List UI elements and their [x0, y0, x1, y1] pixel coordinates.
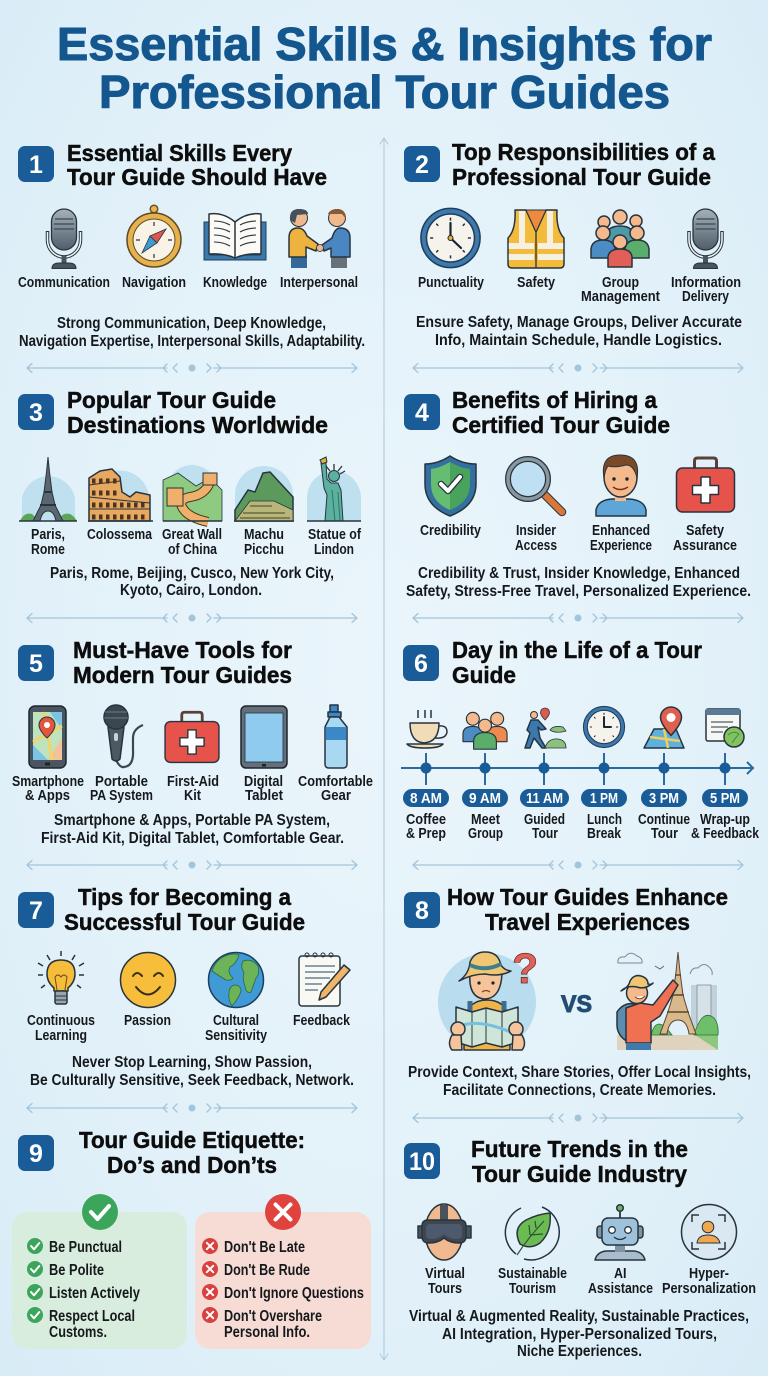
icon labels 10: Tours: [428, 1281, 462, 1297]
summary 5: First-Aid Kit, Digital Tablet, Comfortable Gear.: [41, 830, 344, 847]
timeline labels: Break: [587, 826, 622, 842]
icon labels 5: First-Aid: [167, 774, 219, 790]
panel: 6 day in the life: [401, 637, 760, 842]
card: do's: Customs.: [49, 1324, 107, 1341]
heading 3: Popular Tour Guide: [67, 387, 276, 413]
timeline: 1 PM: [590, 791, 618, 807]
icon labels 10: Virtual: [425, 1266, 465, 1282]
summary 3: Paris, Rome, Beijing, Cusco, New York City,: [50, 565, 334, 582]
icon: statue of liberty: [307, 457, 361, 521]
card: do's: Be Punctual: [49, 1239, 122, 1256]
icon: globe: [208, 952, 264, 1008]
timeline: 11 AM: [526, 791, 563, 807]
badge 8: [404, 892, 440, 928]
title: Professional Tour Guides: [99, 66, 670, 118]
icon labels 3: Picchu: [244, 542, 284, 558]
heading 8: How Tour Guides Enhance: [447, 884, 728, 910]
heading 1: Tour Guide Should Have: [67, 164, 327, 190]
panel: 4 benefits: [404, 387, 751, 600]
icon: clock: [421, 208, 480, 268]
icon labels 2: Group: [602, 275, 639, 291]
card: do's: Respect Local: [49, 1308, 135, 1325]
heading 10: Tour Guide Industry: [472, 1161, 687, 1187]
icon labels 5: Kit: [184, 788, 201, 804]
icon labels 7: Continuous: [27, 1013, 95, 1029]
icon: great wall: [163, 465, 222, 522]
icon: microphone: [48, 209, 80, 268]
icon: map with pin: [644, 707, 684, 748]
icon: notepad and pencil: [299, 953, 350, 1006]
icon labels 1: Navigation: [122, 275, 186, 291]
heading 5: Must-Have Tools for: [73, 637, 292, 663]
timeline labels: Group: [468, 826, 503, 842]
icon: colosseum: [88, 469, 153, 521]
heading 1: Essential Skills Every: [67, 140, 292, 166]
icon labels 7: Cultural: [213, 1013, 259, 1029]
heading 9: Do’s and Don’ts: [107, 1152, 277, 1178]
timeline labels: Coffee: [406, 812, 446, 828]
central vertical divider arrow: [380, 138, 388, 1360]
card: do's: Be Polite: [49, 1262, 104, 1279]
icon labels 5: Comfortable: [298, 774, 373, 790]
card: don'ts: Don't Be Rude: [224, 1262, 310, 1279]
panel: 3 destinations: [18, 387, 361, 599]
timeline labels: & Prep: [406, 826, 446, 842]
icon labels 3: Paris,: [31, 527, 65, 543]
icon labels 10: Sustainable: [498, 1266, 567, 1282]
title: Essential Skills & Insights for: [57, 18, 712, 70]
icon labels 7: Passion: [124, 1013, 171, 1029]
heading 6: [452, 637, 702, 688]
heading 2: Professional Tour Guide: [452, 164, 711, 190]
badge 6: [403, 645, 439, 681]
badge 7: 7: [29, 897, 43, 925]
icon labels 4: Assurance: [673, 538, 737, 554]
heading 4: [452, 387, 670, 438]
icon: leaf: [505, 1207, 559, 1260]
heading 1: [67, 140, 327, 190]
icon labels 1: Interpersonal: [280, 275, 358, 291]
icon: magnifier: [508, 459, 562, 512]
badge 2: [404, 146, 440, 182]
summary 10: Niche Experiences.: [517, 1343, 642, 1360]
badge 1: 1: [29, 151, 43, 179]
timeline labels: [406, 812, 760, 842]
illustration: happy guided tourist: [617, 952, 718, 1050]
icon: machu picchu: [234, 466, 294, 521]
summary 1: [19, 315, 365, 350]
icon labels 2: Punctuality: [418, 275, 484, 291]
heading 10: Future Trends in the: [471, 1136, 688, 1162]
panel: 5 tools: [12, 637, 373, 847]
icon: light bulb: [38, 951, 84, 1004]
heading 9: Tour Guide Etiquette:: [79, 1127, 305, 1153]
heading 8: Travel Experiences: [485, 909, 690, 935]
timeline labels: Tour: [651, 826, 678, 842]
icon labels 10: Tourism: [509, 1281, 556, 1297]
icon: smartphone: [29, 706, 66, 768]
icon labels 5: [12, 774, 373, 804]
badge 4: 4: [415, 399, 429, 427]
icon labels 1: Communication: [18, 275, 110, 291]
summary 7: Be Culturally Sensitive, Seek Feedback, Network.: [30, 1072, 354, 1089]
icon labels 5: PA System: [90, 788, 153, 804]
icon labels 10: Personalization: [662, 1281, 756, 1297]
icon: safety vest: [508, 210, 564, 268]
icon labels 3: [31, 527, 361, 558]
card: don'ts: [195, 1194, 371, 1349]
icon labels 5: Smartphone: [12, 774, 84, 790]
icon: handshake: [289, 209, 350, 268]
badge 6: 6: [414, 650, 428, 678]
icon labels 2: Management: [581, 289, 660, 305]
icon labels 4: Enhanced: [592, 523, 650, 539]
icon: clock small: [583, 706, 625, 748]
icon: first aid: [676, 458, 734, 512]
icon labels 3: Machu: [244, 527, 284, 543]
badge 7: [18, 892, 54, 928]
timeline labels: Lunch: [587, 812, 622, 828]
icon labels 3: Rome: [31, 542, 65, 558]
icon: water bottle: [325, 705, 347, 768]
heading 2: [452, 139, 716, 190]
heading 5: Modern Tour Guides: [73, 662, 292, 688]
icon: coffee cup: [407, 710, 447, 748]
icon labels 7: [27, 1013, 351, 1044]
icon labels 5: & Apps: [25, 788, 70, 804]
timeline: 8 AM: [410, 791, 442, 807]
icon labels 10: Assistance: [588, 1281, 653, 1297]
icon labels 4: [420, 523, 737, 554]
timeline labels: Tour: [532, 826, 558, 842]
icon: shield: [425, 456, 476, 516]
icon labels 4: Insider: [516, 523, 556, 539]
heading 7: [64, 884, 305, 935]
heading 7: Successful Tour Guide: [64, 909, 305, 935]
icon: group of people: [463, 712, 507, 749]
summary 3: Kyoto, Cairo, London.: [120, 582, 262, 599]
badge 5: 5: [29, 650, 43, 678]
summary 7: [30, 1054, 354, 1089]
badge 2: 2: [415, 151, 429, 179]
heading 3: [67, 387, 328, 438]
heading 9: [79, 1127, 305, 1178]
icon: happy person: [596, 455, 646, 516]
heading 3: Destinations Worldwide: [67, 412, 328, 438]
icon labels 3: of China: [168, 542, 218, 558]
heading 4: Certified Tour Guide: [452, 412, 670, 438]
card: don'ts: Personal Info.: [224, 1324, 310, 1341]
card: do's: Listen Actively: [49, 1285, 140, 1302]
timeline: 9 AM: [469, 791, 501, 807]
panel: 9 etiquette: [12, 1127, 371, 1349]
icon labels 2: Information: [671, 275, 741, 291]
panel: 7 tips: [18, 884, 354, 1089]
timeline labels: Guided: [524, 812, 565, 828]
card: don'ts: Don't Overshare: [224, 1308, 322, 1325]
heading 6: Day in the Life of a Tour: [452, 637, 702, 663]
badge 10: 10: [409, 1148, 435, 1176]
icon: browser with globe: [706, 709, 744, 747]
icon labels 4: Access: [515, 538, 557, 554]
icon: VR headset: [418, 1204, 471, 1260]
icon: tablet: [241, 706, 287, 768]
summary 3: [50, 565, 334, 599]
icon: big cross: [265, 1194, 301, 1230]
icon labels 7: Feedback: [293, 1013, 351, 1029]
panel: 2 responsibilities: [404, 139, 742, 349]
heading 8: [447, 884, 728, 935]
heading 6: Guide: [452, 662, 516, 688]
icon: group: [591, 210, 649, 267]
badge 3: [18, 394, 54, 430]
vs label: VS: [561, 991, 592, 1018]
summary 1: Strong Communication, Deep Knowledge,: [57, 315, 326, 332]
badge 10: [404, 1143, 440, 1179]
badge 4: [404, 394, 440, 430]
panel: 1 essential skills: [18, 140, 365, 350]
card: do's: [12, 1194, 187, 1349]
summary 5: Smartphone & Apps, Portable PA System,: [54, 812, 330, 829]
timeline labels: Meet: [471, 812, 500, 828]
badge 5: [18, 645, 54, 681]
icon labels 3: Great Wall: [162, 527, 222, 543]
icon labels 5: Tablet: [245, 788, 283, 804]
icon labels 1: Knowledge: [203, 275, 267, 291]
summary 2: Info, Maintain Schedule, Handle Logistics.: [435, 332, 722, 349]
icon labels 2: Safety: [517, 275, 555, 291]
summary 10: [409, 1308, 749, 1360]
badge 3: 3: [29, 399, 43, 427]
icon labels 7: Learning: [35, 1028, 87, 1044]
summary 1: Navigation Expertise, Interpersonal Skills, Adaptability.: [19, 333, 365, 350]
illustration: confused tourist: [438, 945, 538, 1051]
icon: eiffel tower: [19, 457, 77, 521]
timeline: 5 PM: [710, 791, 740, 807]
icon labels 4: Experience: [590, 538, 652, 554]
badge 9: 9: [29, 1140, 43, 1168]
icon: handheld microphone: [104, 705, 143, 767]
icon: big check: [82, 1194, 118, 1230]
icon labels 3: Colossema: [87, 527, 153, 543]
heading 10: [471, 1136, 688, 1187]
summary 5: [41, 812, 344, 847]
panel: 8 enhance travel: [404, 884, 751, 1099]
icon labels 7: Sensitivity: [205, 1028, 267, 1044]
icon labels 4: Safety: [686, 523, 724, 539]
title: [57, 18, 712, 118]
icon: hiker with map: [525, 708, 566, 748]
icon labels 5: Portable: [95, 774, 148, 790]
summary 7: Never Stop Learning, Show Passion,: [72, 1054, 312, 1071]
icon labels 5: Digital: [244, 774, 283, 790]
icon: open book: [204, 214, 266, 260]
summary 10: AI Integration, Hyper-Personalized Tours,: [442, 1326, 717, 1343]
icon: compass: [127, 205, 181, 267]
icon: robot: [595, 1205, 645, 1260]
icon labels 5: Gear: [321, 788, 351, 804]
summary 8: [408, 1064, 751, 1099]
icon: microphone 2: [689, 209, 722, 268]
icon labels 10: [425, 1266, 756, 1297]
badge 1: [18, 146, 54, 182]
icon: first aid kit: [165, 712, 219, 762]
badge 8: 8: [415, 897, 429, 925]
timeline: 3 PM: [649, 791, 679, 807]
icon labels 10: AI: [614, 1266, 626, 1282]
icon: question mark: ?: [512, 945, 538, 993]
icon labels 2: [418, 275, 741, 305]
heading 5: [73, 637, 292, 688]
icon: smiley: [120, 952, 176, 1008]
summary 4: [406, 565, 751, 600]
panel: 10 future trends: [404, 1136, 756, 1360]
timeline labels: Continue: [638, 812, 690, 828]
heading 7: Tips for Becoming a: [78, 884, 292, 910]
summary 8: Facilitate Connections, Create Memories.: [443, 1082, 716, 1099]
heading 4: Benefits of Hiring a: [452, 387, 658, 413]
badge 9: [18, 1135, 54, 1171]
timeline labels: Wrap-up: [700, 812, 750, 828]
icon labels 3: Statue of: [308, 527, 361, 543]
icon labels 10: Hyper-: [689, 1266, 729, 1282]
heading 2: Top Responsibilities of a: [452, 139, 716, 165]
summary 2: [416, 314, 742, 349]
icon labels 2: Delivery: [682, 289, 729, 305]
icon labels 3: Lindon: [314, 542, 354, 558]
icon: personalization: [682, 1204, 736, 1260]
icon labels 4: Credibility: [420, 523, 481, 539]
icon labels 1: [18, 275, 358, 291]
timeline: [401, 753, 753, 807]
card: don'ts: Don't Ignore Questions: [224, 1285, 364, 1302]
card: don'ts: Don't Be Late: [224, 1239, 305, 1256]
